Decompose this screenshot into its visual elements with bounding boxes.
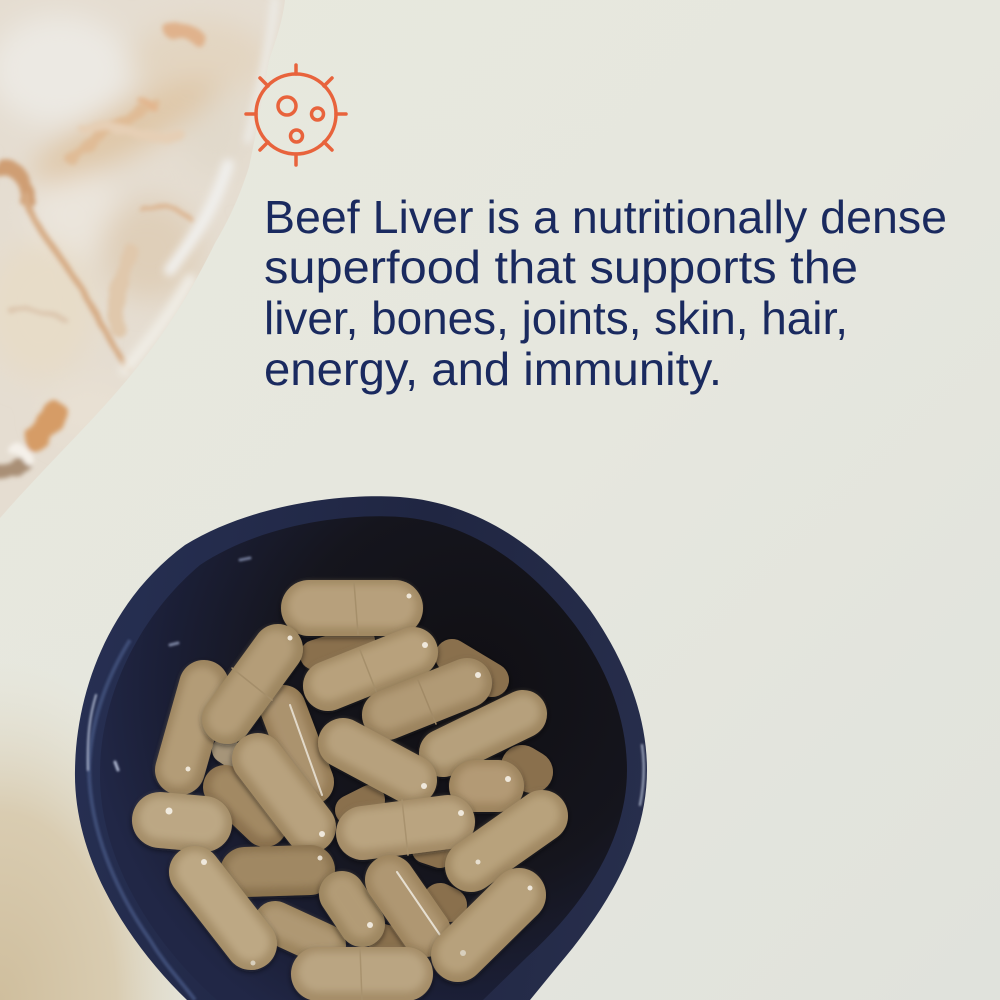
capsule: upper left diagonal: [225, 636, 292, 719]
capsule: centre diagonal: [343, 741, 427, 789]
capsule: upper centre: [328, 642, 428, 696]
capsule: top horizontal: [309, 582, 412, 634]
capsule: right short: [475, 776, 511, 786]
capsule: clear centre-left: [282, 705, 322, 795]
marble white edge: [125, 0, 275, 370]
bowl rim highlight: [89, 640, 195, 1000]
capsule: bottom back: [275, 920, 325, 945]
capsule: lower left slim: [225, 785, 266, 825]
bowl inner cavity: [100, 516, 627, 1000]
headline text: Beef Liver is a nutritionally dense: [264, 191, 947, 243]
headline text: superfood that supports the: [264, 241, 858, 293]
capsule: rear capsules: [225, 641, 532, 940]
bowl outer rim: [75, 496, 647, 1000]
capsule: far left short: [160, 808, 204, 824]
capsule: centre horizontal: [363, 800, 464, 855]
capsule: bottom right diagonal: [457, 886, 532, 956]
marble slab photo: [0, 0, 300, 530]
icon: virus / immunity: [246, 65, 346, 165]
bowl: [75, 496, 647, 1000]
headline text: liver, bones, joints, skin, hair,: [264, 292, 848, 344]
capsule: long centre-left: [258, 757, 325, 837]
capsules pile: [160, 582, 542, 1000]
capsule: bottom horizontal: [318, 948, 406, 1000]
capsule: lower centre horizontal: [245, 856, 322, 872]
headline text: energy, and immunity.: [264, 343, 722, 395]
capsule: lower left long: [195, 859, 256, 966]
capsule: clear lower centre: [389, 872, 442, 938]
capsule: bottom centre short: [342, 892, 373, 928]
capsule: right diagonal: [443, 712, 523, 753]
capsule: left upright: [178, 685, 204, 772]
capsule: right lower diagonal: [470, 814, 542, 866]
capsule: upper right: [387, 672, 481, 724]
bowl gloss streaks: [88, 558, 644, 805]
headline text: [264, 191, 947, 395]
marble veins: [0, 30, 198, 472]
